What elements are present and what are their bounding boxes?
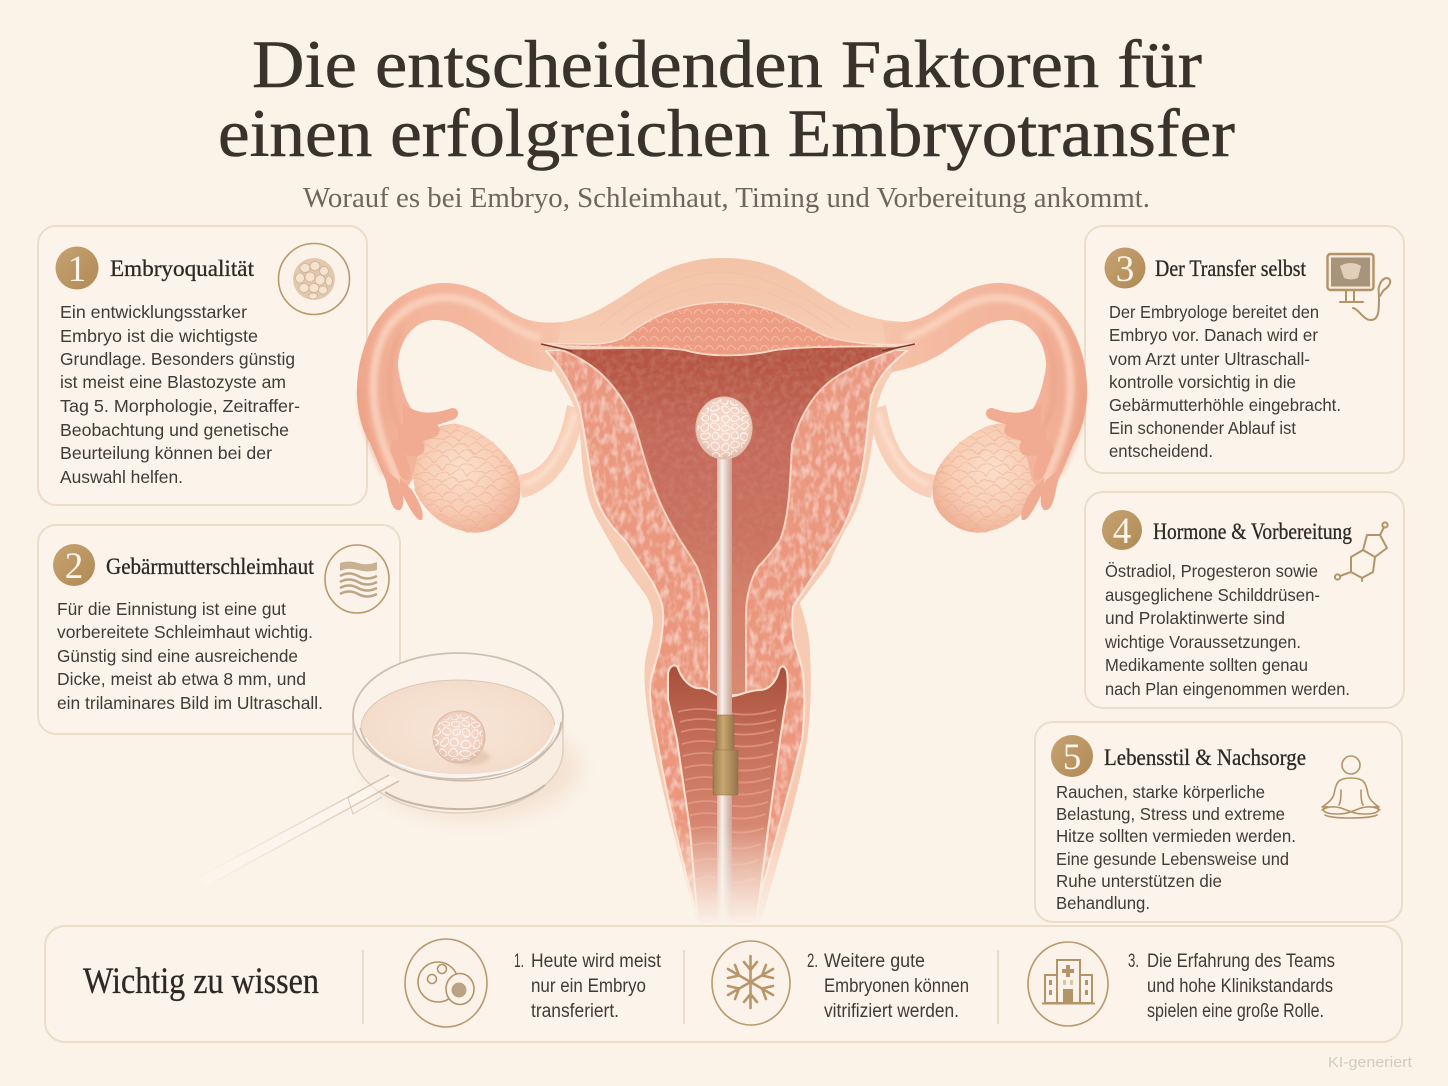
body text 5 (1056, 782, 1296, 913)
left fallopian tube (357, 283, 562, 520)
note 1: nur ein Embryo (531, 976, 646, 997)
body text 3 (1109, 302, 1341, 461)
embryo in dish (433, 711, 490, 765)
body text 1: Beobachtung und genetische (60, 420, 289, 440)
catheter (713, 455, 738, 925)
left fimbriae (383, 403, 458, 520)
icon: hospital (1028, 942, 1108, 1026)
body text 3: Embryo vor. Danach wird er (1109, 325, 1318, 345)
body text 1: Auswahl helfen. (60, 467, 183, 487)
body text 4: und Prolaktinwerte sind (1105, 608, 1285, 628)
title: einen erfolgreichen Embryotransfer (218, 95, 1235, 171)
body text 4: ausgeglichene Schilddrüsen- (1105, 585, 1320, 605)
body text 4: Medikamente sollten genau (1105, 655, 1308, 675)
dish rim (353, 653, 563, 779)
number badge 3 (1104, 248, 1146, 290)
panel: 4 Hormone & Vorbereitung (1085, 492, 1404, 708)
AI generated note: KI-generiert (1328, 1054, 1413, 1071)
number badge 4: 4 (1113, 511, 1131, 552)
note 2: Weitere gute (824, 951, 925, 972)
right ovary and ligament (870, 405, 1040, 533)
note 1: Heute wird meist (531, 951, 662, 972)
number badge 1 (56, 246, 98, 290)
body text 1: ist meist eine Blastozyste am (60, 372, 286, 392)
body text 5: Hitze sollten vermieden werden. (1056, 826, 1296, 846)
body text 3: Ein schonender Ablauf ist (1109, 418, 1296, 438)
note 2: vitrifiziert werden. (824, 1001, 959, 1022)
body text 3: kontrolle vorsichtig in die (1109, 372, 1296, 392)
right fallopian tube (882, 283, 1087, 520)
dish base (353, 687, 563, 813)
title (218, 26, 1235, 171)
vaginal canal (668, 665, 788, 925)
uterus illustration (357, 258, 1087, 925)
body text 2: vorbereitete Schleimhaut wichtig. (57, 622, 313, 642)
body text 1: Tag 5. Morphologie, Zeitraffer- (60, 396, 300, 416)
icon: embryo transfer cells (405, 939, 487, 1027)
icon: blastocyst (278, 244, 350, 314)
heading 5: Lebensstil & Nachsorge (1104, 745, 1306, 770)
dividers (363, 950, 998, 1024)
left ligament (518, 405, 583, 498)
note 2 (807, 951, 969, 1022)
muscle wall (545, 350, 908, 925)
body text 4: wichtige Voraussetzungen. (1104, 632, 1301, 652)
note 2: 2. (807, 951, 818, 972)
note 3: 3. (1128, 951, 1139, 972)
number badge 3: 3 (1116, 249, 1134, 290)
icon: hormone molecule (1335, 522, 1388, 581)
heading: Wichtig zu wissen: Wichtig zu wissen (83, 961, 319, 1002)
body text 5: Rauchen, starke körperliche (1056, 782, 1265, 802)
endometrium fold (541, 302, 916, 355)
note 3: spielen eine große Rolle. (1147, 1001, 1324, 1022)
number badge 2 (53, 544, 95, 587)
uterus outer body (541, 258, 912, 925)
body text 3: entscheidend. (1109, 441, 1213, 461)
body text 1: Ein entwicklungsstarker (60, 302, 247, 322)
left ovary (413, 424, 520, 533)
body text 4: Östradiol, Progesteron sowie (1105, 561, 1318, 581)
panel: Wichtig zu wissen (45, 926, 1402, 1042)
body text 2: ein trilaminares Bild im Ultraschall. (57, 693, 323, 713)
body text 5: Ruhe unterstützen die (1056, 871, 1222, 891)
note 1: transferiert. (531, 1001, 619, 1022)
note 1: 1. (514, 951, 524, 972)
petri dish (353, 653, 578, 818)
body text 2: Günstig sind eine ausreichende (57, 646, 298, 666)
icon: uterine lining layers (325, 545, 389, 613)
number badge 5: 5 (1063, 737, 1081, 778)
body text 5: Belastung, Stress und extreme (1056, 804, 1285, 824)
pipette (200, 775, 399, 887)
note 1 (514, 951, 662, 1022)
dish shadow (370, 718, 578, 818)
body text 2: Dicke, meist ab etwa 8 mm, und (57, 669, 306, 689)
panel: 5 Lebensstil & Nachsorge (1035, 722, 1402, 922)
culture liquid (361, 680, 555, 776)
catheter brass connector (713, 715, 738, 795)
body text 1: Embryo ist die wichtigste (60, 326, 258, 346)
embryo on catheter (696, 397, 752, 459)
body text 3: vom Arzt unter Ultraschall- (1109, 349, 1310, 369)
title: Die entscheidenden Faktoren für (252, 26, 1202, 102)
panel: 2 Gebärmutterschleimhaut (38, 525, 400, 734)
icon: ultrasound monitor (1328, 254, 1390, 320)
body text 1: Grundlage. Besonders günstig (60, 349, 295, 369)
icon: snowflake (712, 941, 790, 1025)
fundus muscle lines (600, 313, 850, 328)
number badge 5 (1051, 735, 1093, 778)
heading 2: Gebärmutterschleimhaut (106, 554, 315, 579)
note 3 (1128, 951, 1335, 1022)
heading 3: Der Transfer selbst (1155, 256, 1307, 281)
left ovary and ligament (413, 405, 583, 533)
body text 3: Gebärmutterhöhle eingebracht. (1109, 395, 1341, 415)
note 3: und hohe Klinikstandards (1147, 976, 1333, 997)
body text 5: Eine gesunde Lebensweise und (1056, 849, 1289, 869)
body text 1: Beurteilung können bei der (60, 443, 272, 463)
heading 1: Embryoqualität (110, 256, 255, 281)
subtitle: Worauf es bei Embryo, Schleimhaut, Timing und Vorbereitung ankommt. (303, 183, 1150, 214)
uterine cavity (556, 346, 908, 695)
icon: meditation figure (1322, 756, 1380, 818)
panel: 3 Der Transfer selbst (1085, 226, 1404, 473)
body text 5: Behandlung. (1056, 893, 1150, 913)
body text 2 (57, 599, 323, 713)
number badge 4 (1102, 510, 1142, 552)
body text 2: Für die Einnistung ist eine gut (57, 599, 286, 619)
body text 4 (1104, 561, 1350, 699)
note 3: Die Erfahrung des Teams (1147, 951, 1335, 972)
body text 1 (60, 302, 300, 487)
body text 3: Der Embryologe bereitet den (1109, 302, 1319, 322)
heading 4: Hormone & Vorbereitung (1153, 519, 1352, 544)
number badge 1: 1 (68, 249, 86, 290)
note 2: Embryonen können (824, 976, 969, 997)
panel: 1 Embryoqualität (38, 226, 367, 505)
body text 4: nach Plan eingenommen werden. (1105, 679, 1350, 699)
number badge 2: 2 (65, 546, 83, 587)
